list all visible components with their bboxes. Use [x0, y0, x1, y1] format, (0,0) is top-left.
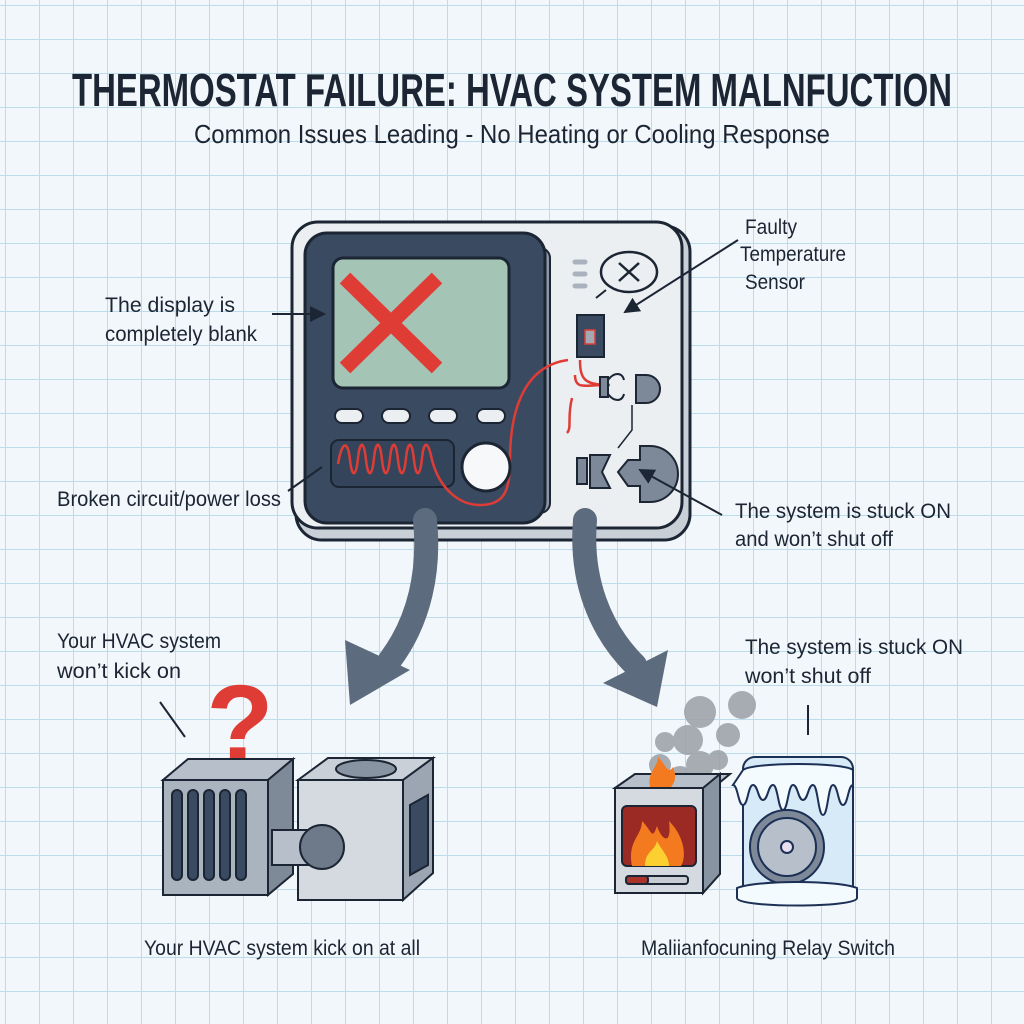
sensor chip [567, 315, 610, 433]
label: broken circuit [57, 467, 322, 511]
label: stuck on [640, 470, 951, 551]
display: blank with X [333, 258, 509, 388]
label: sensor [625, 216, 846, 312]
label: stuck on: and won’t shut off [735, 528, 893, 551]
buttons [335, 409, 505, 423]
label: right stuck on: won’t shut off [744, 665, 871, 688]
icon: smoke [649, 691, 756, 790]
label: right stuck on [744, 636, 963, 735]
coil [331, 360, 568, 505]
label: right stuck on: The system is stuck ON [745, 636, 963, 659]
label: display blank: completely blank [105, 323, 257, 346]
caption: right: Maliianfocuning Relay Switch [641, 937, 895, 960]
illustration: frozen AC unit [733, 757, 857, 906]
label: sensor: Faulty [745, 216, 797, 239]
label: sensor: Sensor [745, 271, 805, 294]
indicator lines [575, 262, 585, 286]
label: won't kick on: Your HVAC system [57, 630, 221, 653]
icon: question mark: ? [206, 663, 274, 786]
relay [577, 374, 678, 502]
label: stuck on: The system is stuck ON [735, 500, 951, 523]
arrow: left [345, 520, 426, 705]
subtitle: Common Issues Leading - No Heating or Cooling Response [194, 119, 830, 149]
label: won't kick on: won’t kick on [56, 660, 181, 683]
caption: left: Your HVAC system kick on at all [144, 937, 420, 960]
label: display blank [105, 294, 324, 346]
illustration: overheating furnace [615, 757, 730, 893]
illustration: HVAC units [163, 758, 433, 900]
label: display blank: The display is [105, 294, 235, 317]
label: broken circuit: Broken circuit/power loss [57, 488, 281, 511]
arrow: right [584, 520, 668, 707]
label: sensor: Temperature [740, 243, 846, 266]
thermostat [292, 222, 690, 540]
label: won't kick on [56, 630, 221, 737]
sensor bubble [596, 252, 657, 298]
